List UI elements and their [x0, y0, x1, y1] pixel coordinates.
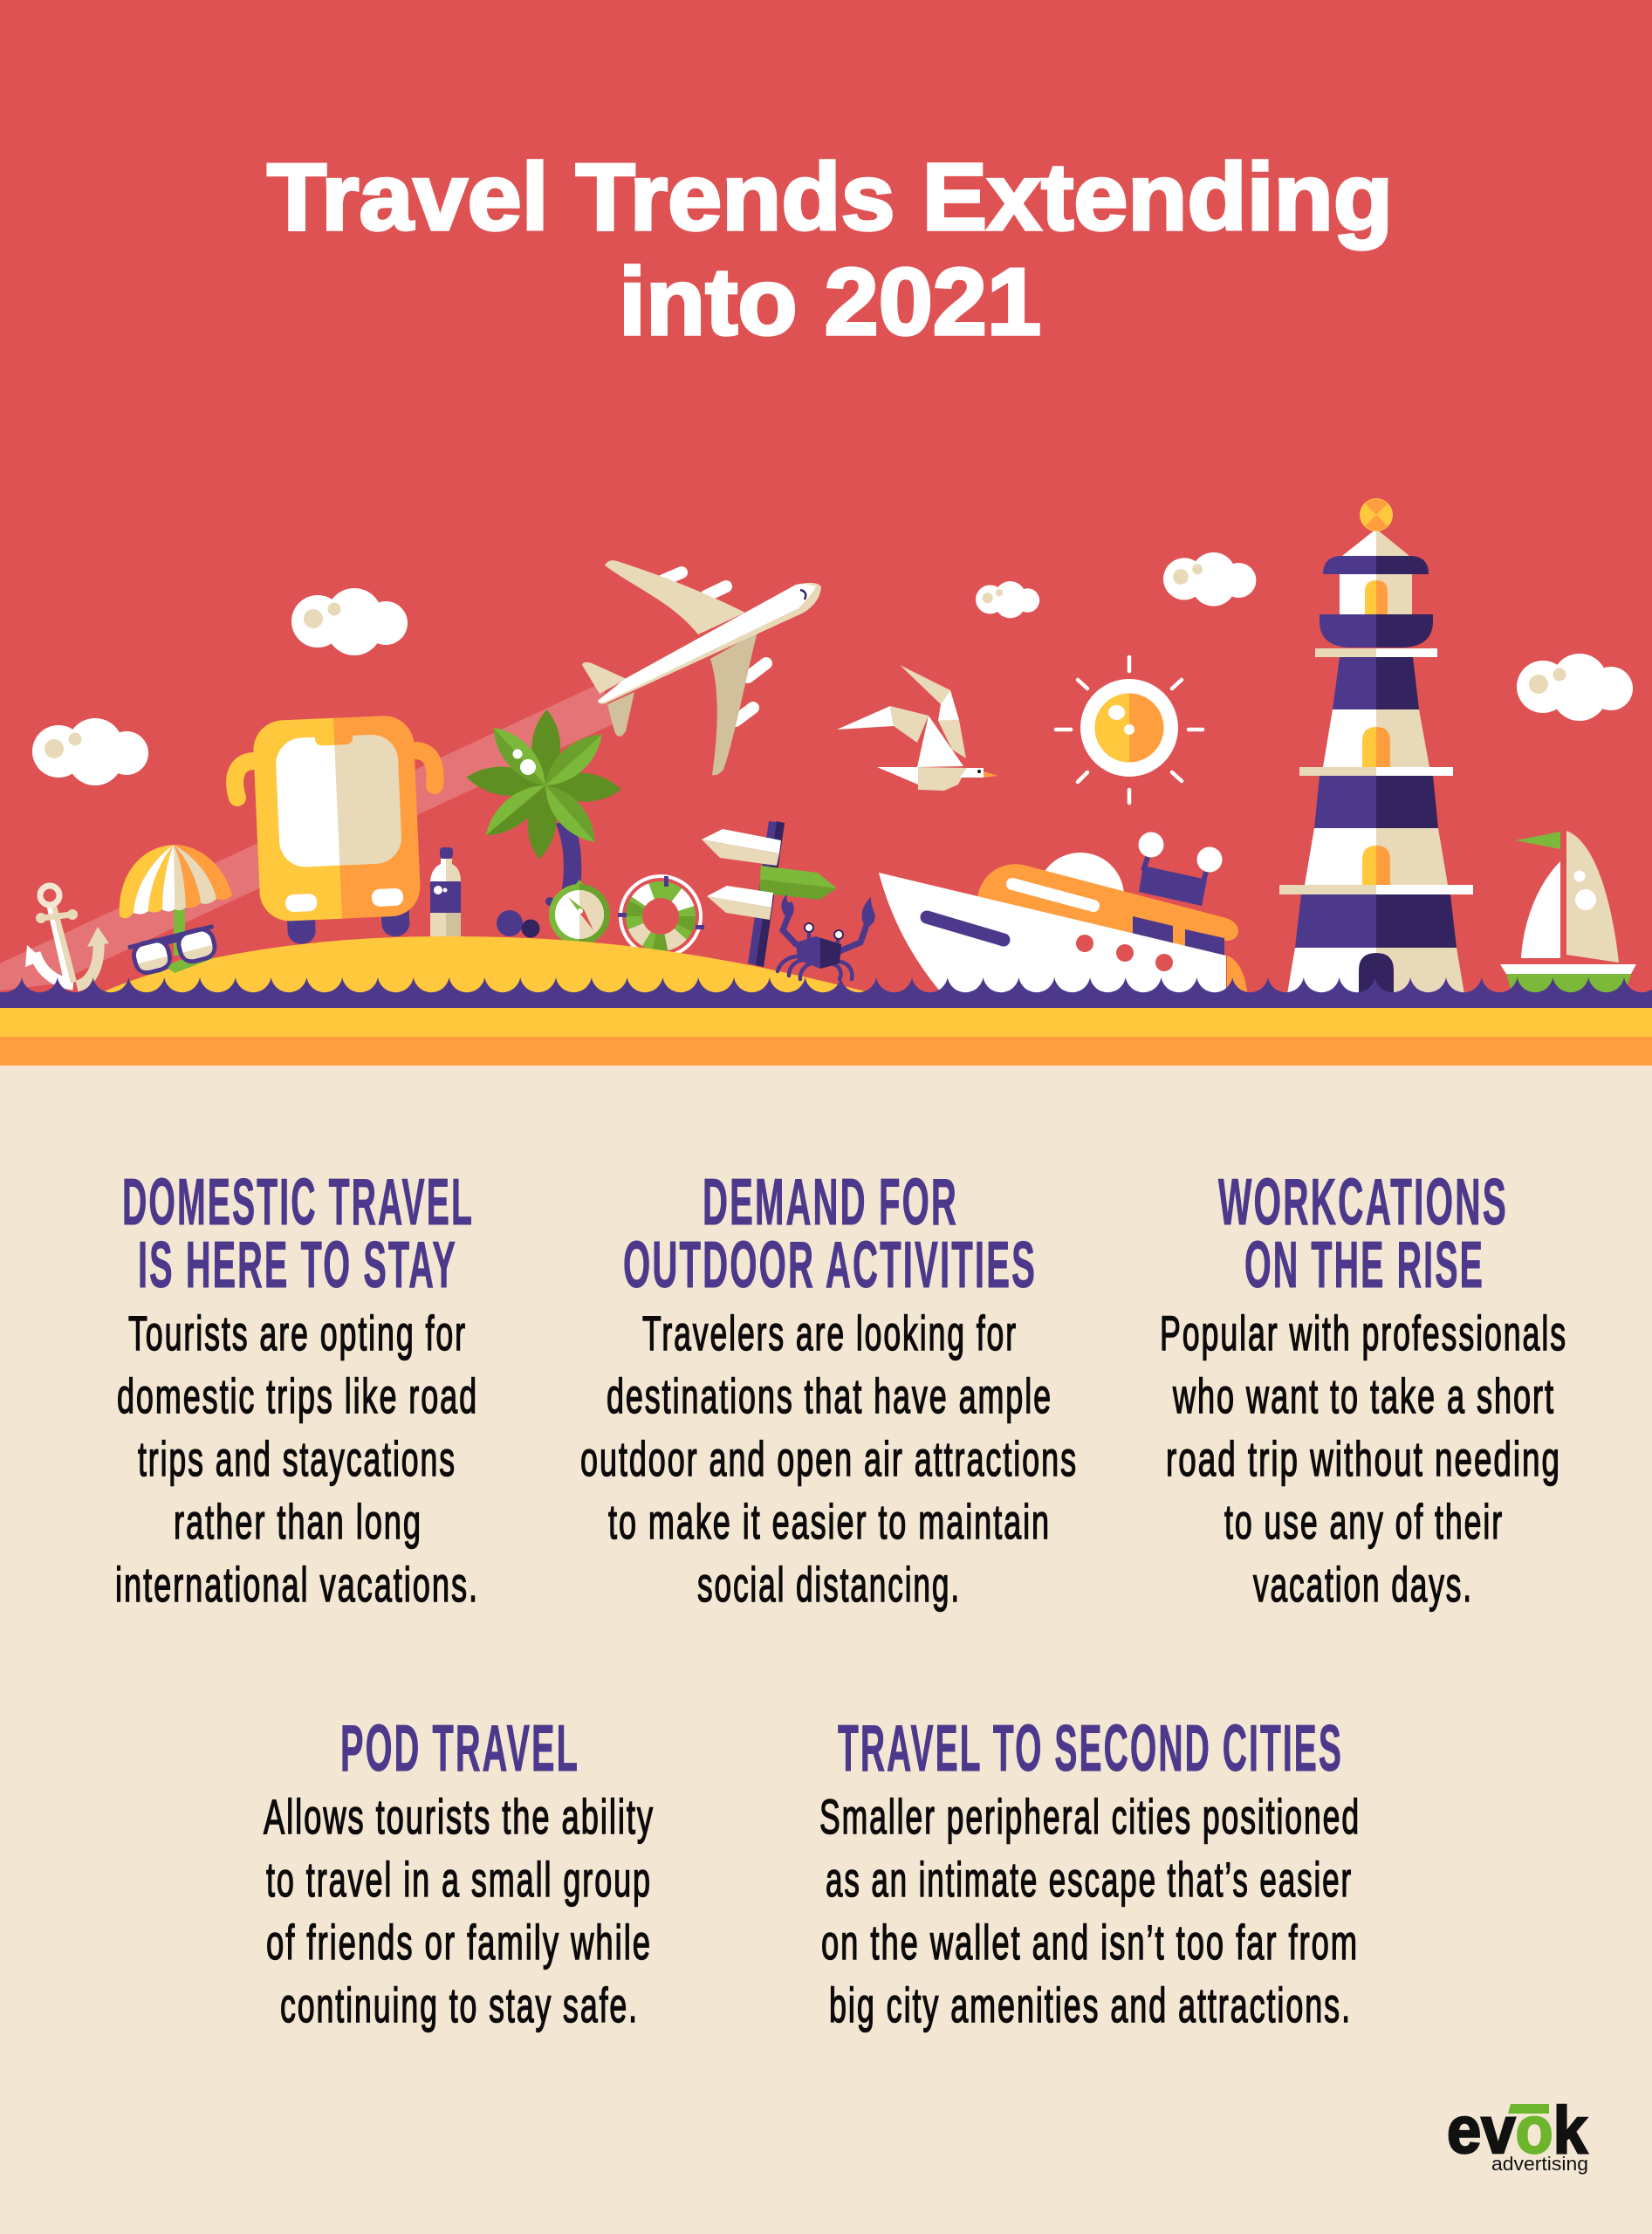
title: Travel Trends Extending — [267, 144, 1393, 250]
heading: IS HERE TO STAY — [138, 1228, 457, 1301]
body text: trips and staycations — [138, 1431, 456, 1486]
title — [267, 144, 1393, 355]
body text: as an intimate escape that’s easier — [826, 1852, 1353, 1907]
cloud 4 — [1163, 552, 1256, 606]
logo: evok advertising: advertising — [1491, 2153, 1588, 2175]
body text — [1160, 1305, 1567, 1612]
body text — [819, 1789, 1361, 2032]
title: into 2021 — [619, 249, 1041, 355]
panel: second cities — [819, 1711, 1361, 2032]
heading: POD TRAVEL — [340, 1711, 579, 1785]
icon: lighthouse — [1279, 498, 1473, 999]
icon: yacht — [879, 833, 1248, 999]
icon: signpost — [702, 821, 837, 967]
body text: to make it easier to maintain — [608, 1494, 1051, 1549]
cloud 1 — [291, 588, 408, 655]
logo: evok advertising: evok — [1447, 2094, 1588, 2168]
body text — [580, 1305, 1078, 1612]
icon: airplane — [582, 560, 821, 775]
panel: outdoor activities — [580, 1165, 1078, 1612]
body text — [115, 1305, 479, 1612]
icon: beach umbrella — [120, 845, 232, 973]
illustration: travel scene — [0, 498, 1652, 1066]
body text: international vacations. — [115, 1557, 479, 1612]
body text: domestic trips like road — [117, 1368, 478, 1423]
plane trail — [0, 682, 613, 990]
background: cream lower panel — [0, 1066, 1652, 2234]
icon: bus — [235, 715, 435, 946]
icon: palm tree — [465, 709, 622, 899]
body text: big city amenities and attractions. — [829, 1977, 1352, 2032]
body text — [264, 1789, 655, 2032]
body text: on the wallet and isn’t too far from — [821, 1915, 1359, 1970]
icon: stones — [497, 910, 539, 937]
body text: rather than long — [174, 1494, 422, 1549]
heading — [623, 1165, 1037, 1301]
body text: of friends or family while — [266, 1915, 652, 1970]
stripe: yellow band — [0, 1008, 1652, 1037]
body text: Tourists are opting for — [128, 1305, 467, 1360]
heading — [1218, 1165, 1508, 1301]
cloud 5 — [1517, 654, 1633, 721]
body text: Allows tourists the ability — [264, 1789, 655, 1844]
icon: sailboat — [1500, 831, 1636, 999]
cloud 2 — [32, 718, 148, 785]
body text: to travel in a small group — [266, 1852, 652, 1907]
background: red sky — [0, 0, 1652, 1066]
heading: DEMAND FOR — [703, 1165, 958, 1238]
panel: workcations — [1160, 1165, 1567, 1612]
icon: lifebuoy — [618, 876, 704, 956]
heading — [122, 1165, 474, 1301]
icon: crab — [778, 894, 875, 979]
icon: compass — [545, 880, 610, 945]
body text: vacation days. — [1253, 1557, 1473, 1612]
body text: Smaller peripheral cities positioned — [819, 1789, 1361, 1844]
heading: OUTDOOR ACTIVITIES — [623, 1228, 1037, 1301]
icon: sunglasses — [127, 924, 221, 976]
icon: sun — [1056, 657, 1203, 803]
water: purple waves — [0, 977, 1652, 1009]
icon: anchor — [25, 886, 109, 986]
icon: bottle — [430, 847, 461, 947]
cloud 3 — [976, 581, 1039, 618]
icon: sand island — [87, 936, 868, 1004]
body text: outdoor and open air attractions — [580, 1431, 1078, 1486]
body text: continuing to stay safe. — [280, 1977, 639, 2032]
panel: pod travel — [264, 1711, 655, 2032]
body text: to use any of their — [1224, 1494, 1504, 1549]
stripe: orange band — [0, 1037, 1652, 1066]
heading: DOMESTIC TRAVEL — [122, 1165, 474, 1238]
body text: social distancing. — [697, 1557, 961, 1612]
body text: destinations that have ample — [607, 1368, 1052, 1423]
body text: Travelers are looking for — [642, 1305, 1018, 1360]
icon: seagull — [837, 665, 998, 791]
panel: domestic travel — [115, 1165, 479, 1612]
